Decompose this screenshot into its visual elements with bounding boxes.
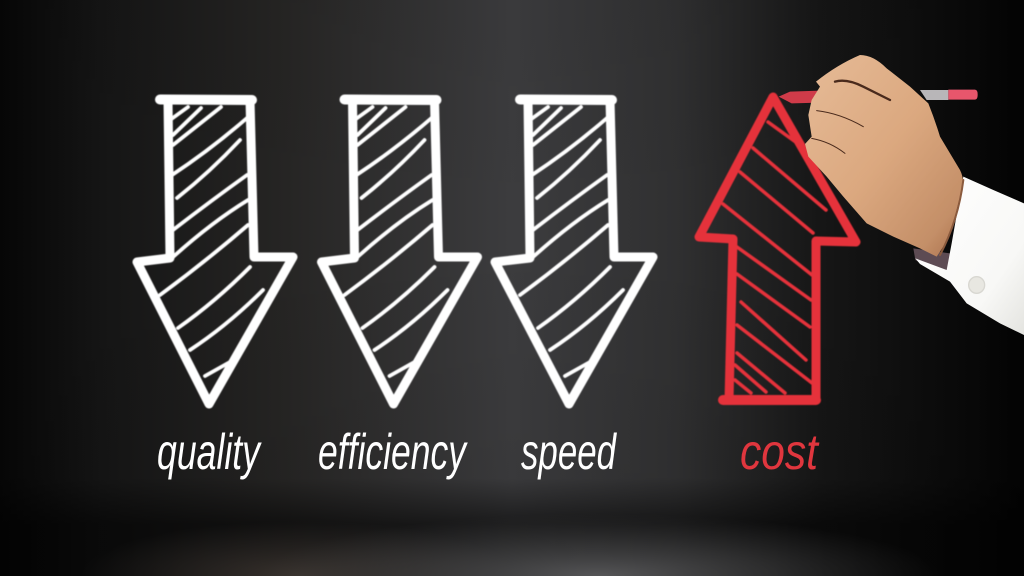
- marker pen: [779, 90, 978, 103]
- shirt sleeve: [915, 177, 1024, 335]
- label: efficiency: efficiency: [318, 424, 468, 480]
- cuff button: [969, 277, 985, 293]
- shirt inner cuff: [913, 248, 950, 272]
- label: cost: cost: [740, 424, 820, 480]
- finger creases: [812, 81, 963, 255]
- arrow down: quality: [137, 100, 293, 404]
- label: speed: speed: [521, 424, 618, 480]
- arrow down: speed: [495, 100, 653, 404]
- arrow up: cost: [699, 97, 856, 400]
- hand: [805, 55, 963, 257]
- hand drawing with red marker: [779, 55, 1024, 335]
- arrow down: efficiency: [322, 100, 478, 404]
- label: quality: quality: [157, 424, 262, 480]
